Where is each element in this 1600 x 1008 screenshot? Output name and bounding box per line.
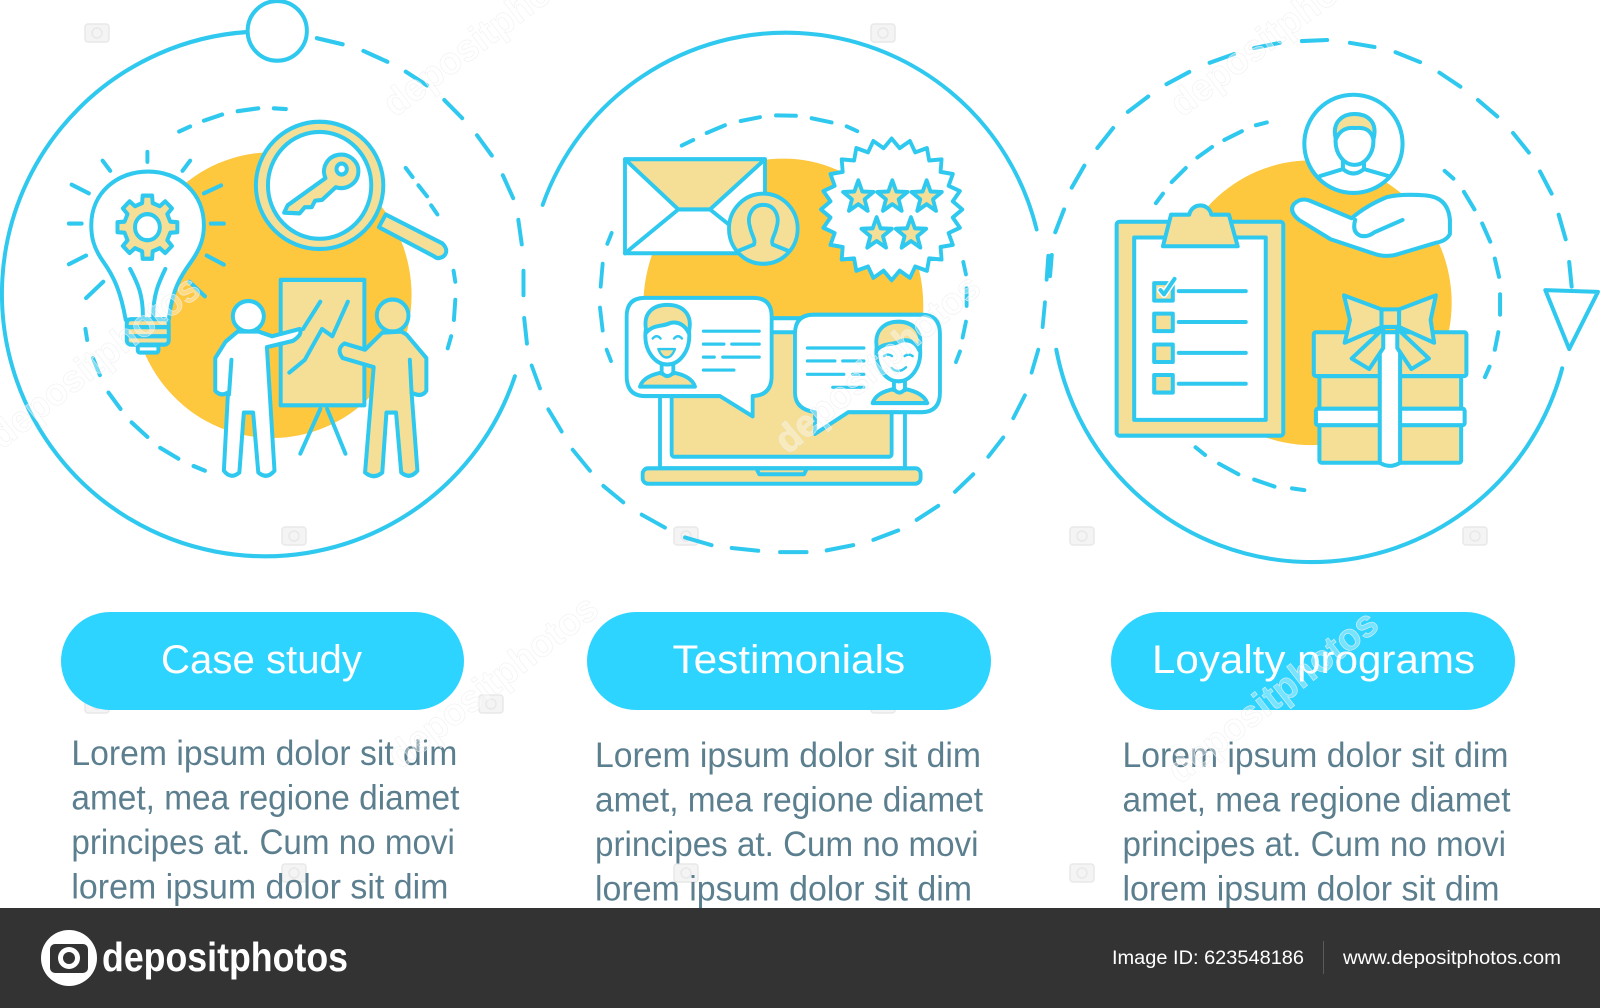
text block: testimonials: lorem ipsum dolor sit dim <box>595 870 972 908</box>
text block: case study <box>71 734 460 906</box>
stock watermarks: depositphotos <box>767 266 989 462</box>
orange backdrop circle <box>643 159 923 453</box>
heading pill: loyalty programs: Loyalty programs <box>1152 638 1475 682</box>
icon: presentation easel with chart <box>281 280 364 454</box>
dashed outer ring arc <box>317 38 527 344</box>
text block: loyalty programs <box>1122 736 1511 908</box>
solid outer ring arc <box>543 33 1037 229</box>
website address: www.depositphotos.com <box>1342 948 1561 969</box>
dashed outer ring arc <box>1050 40 1572 287</box>
icon: rating badge <box>821 139 962 280</box>
icon: clipboard checklist <box>1117 205 1283 436</box>
text block: testimonials: amet, mea regione diamet <box>595 780 983 820</box>
dashed outer ring arc <box>532 256 1048 552</box>
icon: laptop <box>643 318 921 484</box>
panel: case study illustration <box>2 1 527 556</box>
text block: loyalty programs: amet, mea regione diamet <box>1122 780 1511 820</box>
text block: case study: Lorem ipsum dolor sit dim <box>71 734 457 773</box>
stock watermarks <box>0 0 1391 792</box>
orange backdrop circle <box>1171 160 1452 445</box>
text block: testimonials <box>595 736 983 908</box>
icon: magnifier with key <box>256 122 446 258</box>
icon: customer avatar <box>1304 95 1403 193</box>
heading pill: case study: Case study <box>161 638 362 682</box>
panel: loyalty programs illustration <box>1050 40 1598 562</box>
speech bubble: smiling customer <box>795 315 940 434</box>
text block: case study: lorem ipsum dolor sit dim <box>71 868 448 906</box>
solid outer ring arc <box>1056 350 1562 562</box>
stock watermarks: depositphotos <box>1160 602 1386 792</box>
panel: testimonials illustration <box>532 33 1048 552</box>
text block: loyalty programs: principes at. Cum no movi <box>1122 825 1506 864</box>
footer bar <box>0 908 1600 1008</box>
speech bubble: happy customer <box>627 298 772 416</box>
text block: testimonials: principes at. Cum no movi <box>595 825 978 864</box>
arrow head <box>1545 290 1598 349</box>
icon: gift box <box>1314 295 1466 466</box>
icon: depositphotos camera logo <box>41 930 97 986</box>
orange backdrop circle <box>133 152 412 438</box>
inner dashed ring <box>600 115 967 362</box>
text block: testimonials: Lorem ipsum dolor sit dim <box>595 736 981 775</box>
image id: Image ID: 623548186 <box>1112 948 1304 969</box>
text block: loyalty programs: lorem ipsum dolor sit dim <box>1122 870 1500 908</box>
heading pill: testimonials <box>587 612 991 710</box>
heading pill: testimonials: Testimonials <box>672 638 905 682</box>
text block: loyalty programs: Lorem ipsum dolor sit dim <box>1122 736 1508 775</box>
text block: case study: amet, mea regione diamet <box>71 778 460 818</box>
icon: open hand <box>1292 195 1450 256</box>
inner dashed ring <box>1156 122 1500 490</box>
ring marker circle <box>248 1 307 61</box>
icon: contact avatar <box>729 194 798 264</box>
icon: light bulb <box>69 152 224 353</box>
faint stock camera marks <box>85 24 1487 882</box>
inner dashed ring <box>85 108 455 471</box>
heading pill: case study <box>61 612 464 710</box>
icon: listener figure <box>340 300 426 476</box>
icon: presenter figure <box>215 301 300 476</box>
text block: case study: principes at. Cum no movi <box>71 823 455 862</box>
solid outer ring arc <box>2 32 515 556</box>
icon: envelope <box>625 159 765 253</box>
heading pill: loyalty programs <box>1111 612 1515 710</box>
logo wordmark: depositphotos <box>102 934 348 980</box>
stock watermarks: depositphotos <box>380 587 606 777</box>
